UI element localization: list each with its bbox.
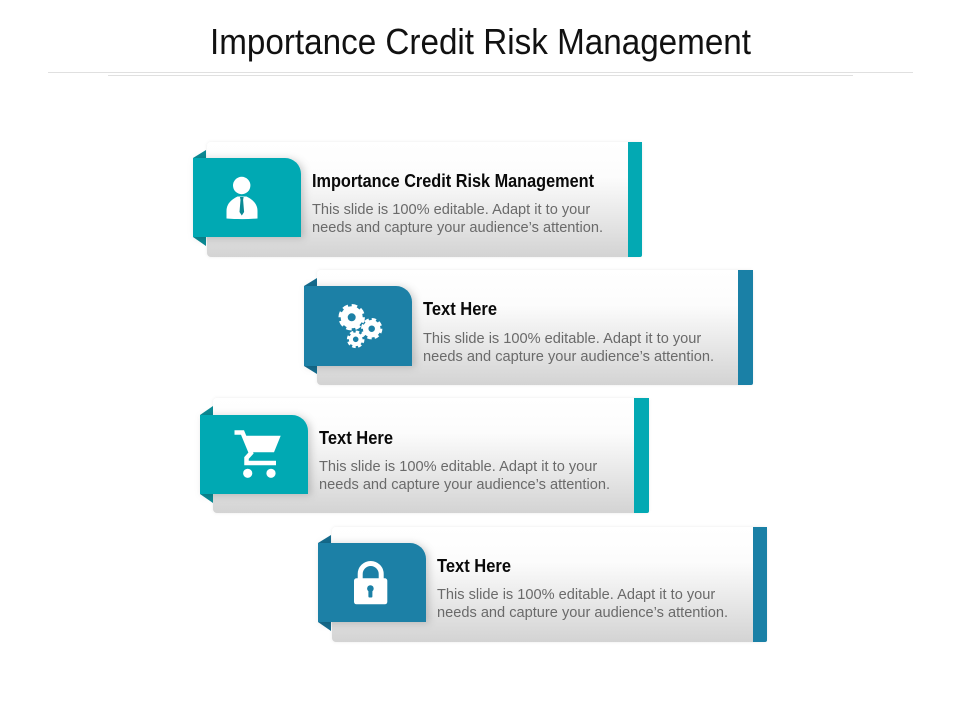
- card 2 background: [317, 270, 753, 385]
- card 4 accent bar: [753, 527, 767, 642]
- card 1 ribbon folds: [193, 150, 206, 246]
- card 2 heading: Text Here: [423, 299, 497, 319]
- icon: person: [226, 177, 258, 219]
- card 3 body: This slide is 100% editable. Adapt it to your: [319, 459, 597, 475]
- icon: shopping cart: [234, 432, 281, 478]
- card 2 accent bar: [738, 270, 753, 385]
- panel: card 1: [193, 142, 642, 257]
- card 4 heading: Text Here: [437, 556, 511, 576]
- card 4 body: needs and capture your audience’s attention.: [437, 605, 728, 621]
- panel: card 4: [318, 527, 767, 642]
- panel: card 3: [200, 398, 649, 513]
- card 3 background: [213, 398, 649, 513]
- card 1 icon tab: [193, 158, 301, 237]
- icon: padlock: [354, 564, 387, 604]
- card 3 heading: Text Here: [319, 428, 393, 448]
- card 3 ribbon folds: [200, 406, 213, 503]
- card 2 icon tab: [304, 286, 412, 366]
- card 3 icon tab: [200, 415, 308, 494]
- card 2 body: This slide is 100% editable. Adapt it to your: [423, 331, 701, 347]
- card 4 background: [332, 527, 767, 642]
- title: Importance Credit Risk Management: [210, 21, 751, 62]
- card 4 body: This slide is 100% editable. Adapt it to your: [437, 587, 715, 603]
- card 4 ribbon folds: [318, 535, 331, 631]
- panel: card 2: [304, 270, 753, 385]
- card 1 background: [207, 142, 642, 257]
- card 4 icon tab: [318, 543, 426, 622]
- card 1 body: needs and capture your audience’s attention.: [312, 220, 603, 236]
- card 1 heading: Importance Credit Risk Management: [312, 171, 594, 191]
- card 1 body: This slide is 100% editable. Adapt it to your: [312, 202, 590, 218]
- card 3 accent bar: [634, 398, 649, 513]
- card 2 ribbon folds: [304, 278, 317, 374]
- icon: gears: [340, 306, 381, 347]
- card 2 body: needs and capture your audience’s attention.: [423, 349, 714, 365]
- card 3 body: needs and capture your audience’s attention.: [319, 477, 610, 493]
- card 1 accent bar: [628, 142, 642, 257]
